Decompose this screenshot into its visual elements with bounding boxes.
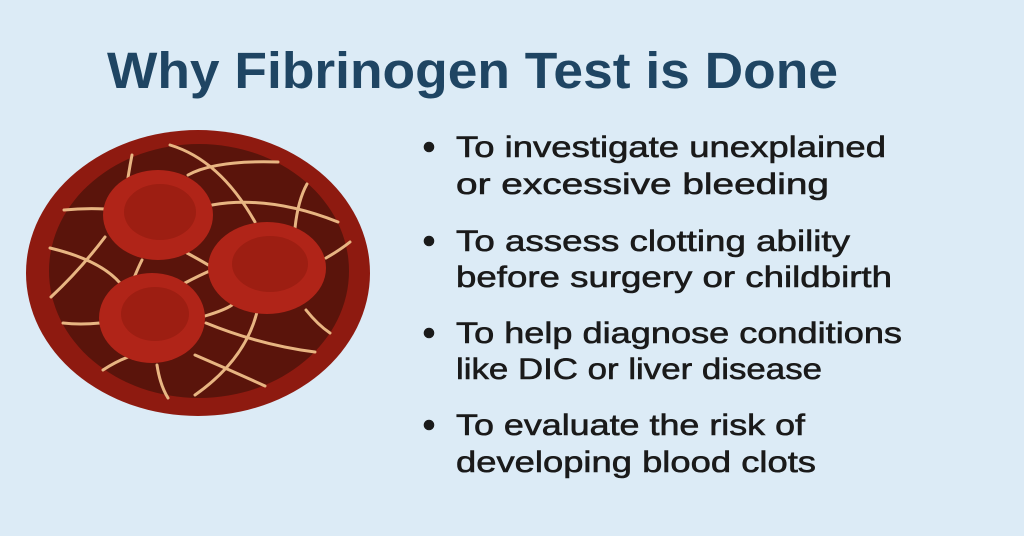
bullet 1	[424, 131, 886, 201]
bullet list	[424, 131, 902, 479]
bullet 2: To assess clotting ability	[456, 225, 850, 258]
bullet 3	[424, 317, 902, 386]
bullet 2	[424, 225, 892, 294]
red blood cell 3	[99, 273, 205, 363]
red blood cell 1	[103, 170, 213, 260]
bullet 4	[424, 409, 816, 479]
bullet 2: before surgery or childbirth	[456, 261, 892, 294]
bullet 3: To help diagnose conditions	[456, 317, 902, 350]
bullet 4: To evaluate the risk of	[456, 409, 806, 442]
bullet 1: or excessive bleeding	[456, 168, 829, 201]
bullet 3: like DIC or liver disease	[456, 353, 822, 386]
fibrin fibers	[50, 145, 350, 398]
illustration: blood clot	[26, 130, 370, 416]
title: Why Fibrinogen Test is Done	[107, 42, 838, 99]
red blood cell 2	[208, 222, 326, 314]
bullet 1: To investigate unexplained	[456, 131, 886, 164]
bullet 4: developing blood clots	[456, 446, 816, 479]
